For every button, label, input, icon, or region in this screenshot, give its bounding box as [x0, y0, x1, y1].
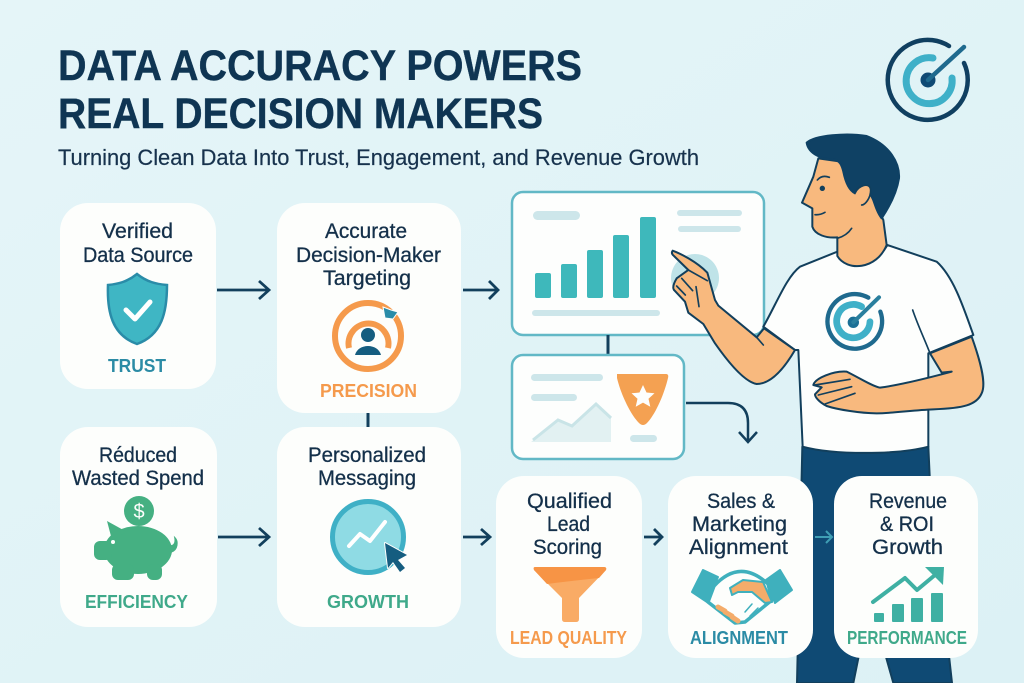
subtitle: Turning Clean Data Into Trust, Engagement, and Revenue Growth — [58, 145, 699, 170]
card: revenue and roi growth: Revenue — [869, 490, 947, 513]
card: accurate targeting — [277, 203, 461, 413]
card: sales and marketing alignment: Marketing — [692, 513, 787, 536]
icon: shirt target — [827, 294, 882, 349]
arrow — [217, 281, 269, 299]
panel: bar chart screen — [512, 192, 764, 335]
icon: growth chart — [873, 567, 944, 622]
arrow: screen to lead flow — [686, 403, 757, 442]
connector — [606, 335, 610, 355]
card: revenue and roi growth: & ROI — [880, 513, 934, 536]
area chart — [531, 404, 611, 442]
arrow — [815, 531, 832, 543]
highlight circle — [671, 254, 719, 302]
card: sales and marketing alignment: Sales & — [707, 490, 775, 513]
arrow — [463, 529, 490, 545]
card: reduced wasted spend: Réduced — [99, 444, 177, 467]
icon: funnel — [534, 567, 606, 622]
icon: shield — [108, 274, 167, 344]
card: personalized messaging: Personalized — [308, 444, 426, 467]
card: sales and marketing alignment: Alignment — [689, 536, 788, 559]
title: REAL DECISION MAKERS — [58, 90, 543, 138]
card: reduced wasted spend: EFFICIENCY — [85, 592, 188, 612]
card: personalized messaging: Messaging — [318, 467, 416, 490]
person — [672, 135, 983, 683]
bar chart — [535, 217, 656, 298]
card: revenue and roi growth — [834, 476, 978, 658]
hair — [807, 135, 899, 218]
icon: chart cursor — [332, 502, 407, 572]
card: qualified lead scoring: Lead — [547, 513, 590, 536]
title — [58, 42, 582, 138]
icon: target logo — [888, 40, 968, 120]
icon: piggy bank — [94, 496, 177, 580]
icon: badge star — [617, 374, 668, 425]
card: sales and marketing alignment — [668, 476, 813, 658]
card: accurate targeting: Accurate — [325, 220, 407, 243]
trousers — [797, 447, 952, 683]
card: verified data source: Verified — [102, 220, 173, 243]
arrow — [218, 528, 269, 546]
card: verified data source — [60, 203, 216, 389]
icon: handshake — [692, 570, 792, 623]
card: accurate targeting: PRECISION — [320, 381, 417, 401]
card: qualified lead scoring: LEAD QUALITY — [510, 628, 627, 648]
icon: piggy bank: $ — [133, 501, 145, 523]
pointing arm and hand — [672, 251, 795, 384]
shirt details — [913, 310, 930, 353]
card: revenue and roi growth: PERFORMANCE — [847, 628, 967, 648]
card: qualified lead scoring: Scoring — [533, 536, 602, 559]
neck and face — [802, 158, 887, 266]
card: verified data source: Data Source — [83, 244, 193, 267]
relaxed arm and hand — [813, 337, 983, 413]
card: reduced wasted spend: Wasted Spend — [72, 467, 204, 490]
card: qualified lead scoring — [496, 476, 642, 658]
connector — [366, 413, 370, 427]
arrow — [463, 281, 498, 299]
card: sales and marketing alignment: ALIGNMENT — [690, 628, 788, 648]
card: personalized messaging — [277, 427, 461, 627]
icon: target person — [335, 303, 401, 369]
card: revenue and roi growth: Growth — [872, 536, 943, 559]
card: reduced wasted spend — [60, 427, 217, 627]
card: verified data source: TRUST — [108, 356, 166, 376]
shirt — [763, 245, 973, 453]
arrow — [644, 529, 662, 545]
eye and smile — [815, 176, 852, 238]
card: personalized messaging: GROWTH — [327, 592, 409, 612]
ear — [855, 185, 871, 205]
card: qualified lead scoring: Qualified — [527, 490, 612, 513]
card: accurate targeting: Targeting — [323, 267, 411, 290]
title: DATA ACCURACY POWERS — [58, 42, 582, 90]
panel: score screen — [512, 355, 684, 459]
card: accurate targeting: Decision-Maker — [296, 244, 441, 267]
